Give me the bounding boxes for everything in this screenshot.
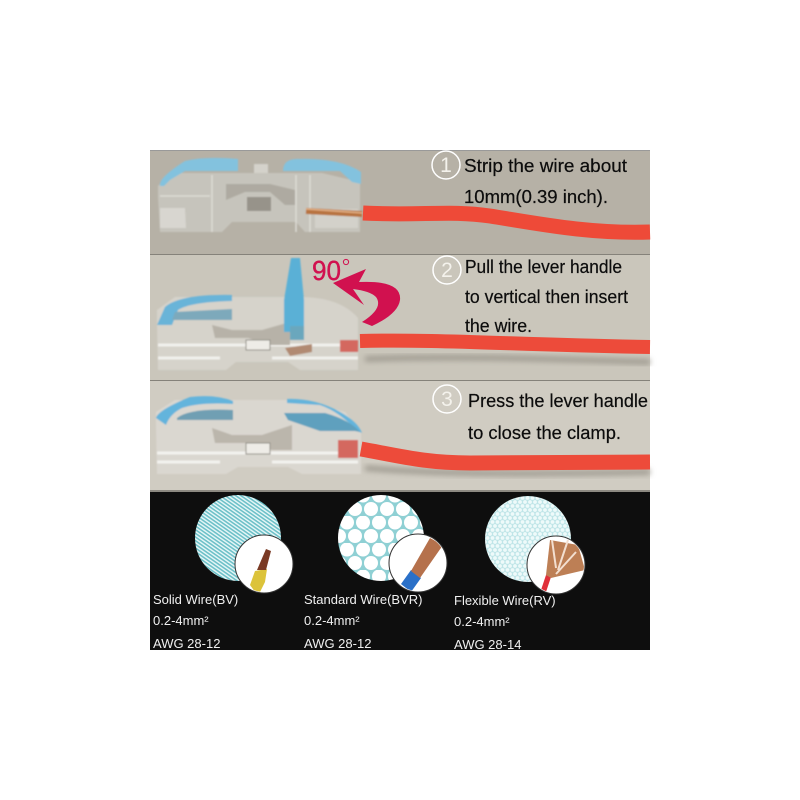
solid wire label: Solid Wire(BV) (153, 592, 238, 607)
red wire 2 (360, 341, 650, 347)
standard wire label (304, 592, 422, 651)
wire type: flexible (454, 496, 585, 652)
standard cross-section circle (338, 495, 424, 581)
connector with raised lever (157, 258, 358, 370)
number badge 2 (433, 256, 461, 284)
step 1 text: Strip the wire about (464, 156, 627, 176)
solid wire inset photo (235, 535, 293, 596)
flexible wire label (454, 593, 556, 652)
degree mark (343, 259, 349, 265)
flexible wire label: Flexible Wire(RV) (454, 593, 556, 608)
panel: step 1 strip the wire (150, 150, 650, 254)
number badge 3 (433, 385, 461, 413)
red wire 1 (363, 213, 650, 232)
red wire 3 (361, 449, 650, 463)
number badge 1 (432, 151, 460, 179)
standard wire label: AWG 28-12 (304, 636, 371, 651)
number badge 1: 1 (440, 154, 452, 177)
curved arrow (333, 269, 400, 326)
wire type: solid (153, 495, 293, 651)
standard wire inset photo (389, 534, 447, 592)
connector with stripped wire (158, 158, 362, 232)
wire type: standard (304, 495, 447, 651)
flexible wire label: 0.2-4mm² (454, 614, 510, 629)
step 3 text (433, 385, 648, 443)
number badge 2: 2 (441, 259, 453, 282)
standard wire label: 0.2-4mm² (304, 613, 360, 628)
solid cross-section circle (195, 495, 281, 581)
step 1 text (432, 151, 627, 207)
panel: wire types (150, 490, 650, 652)
connector with closed levers (156, 396, 362, 474)
step 2 text (433, 256, 628, 336)
flexible wire label: AWG 28-14 (454, 637, 521, 652)
step 2 text: to vertical then insert (465, 287, 628, 307)
step 3 text: to close the clamp. (468, 423, 621, 443)
standard wire label: Standard Wire(BVR) (304, 592, 422, 607)
panel: step 2 pull lever (150, 254, 650, 380)
solid wire label (153, 594, 238, 648)
step 3 text: Press the lever handle (468, 391, 648, 411)
step 1 text: 10mm(0.39 inch). (464, 187, 608, 207)
flexible wire inset photo (527, 536, 585, 594)
flexible cross-section circle (485, 496, 571, 582)
solid wire label: 0.2-4mm² (153, 613, 209, 628)
number badge 3: 3 (441, 388, 453, 411)
step 2 text: the wire. (465, 316, 532, 336)
red wire 2 shadow (365, 358, 650, 362)
90 degree label: 90 (312, 255, 341, 286)
solid wire label: AWG 28-12 (153, 636, 220, 651)
panel: step 3 close clamp (150, 380, 650, 490)
step 2 text: Pull the lever handle (465, 257, 622, 277)
red wire 3 shadow (365, 468, 650, 473)
